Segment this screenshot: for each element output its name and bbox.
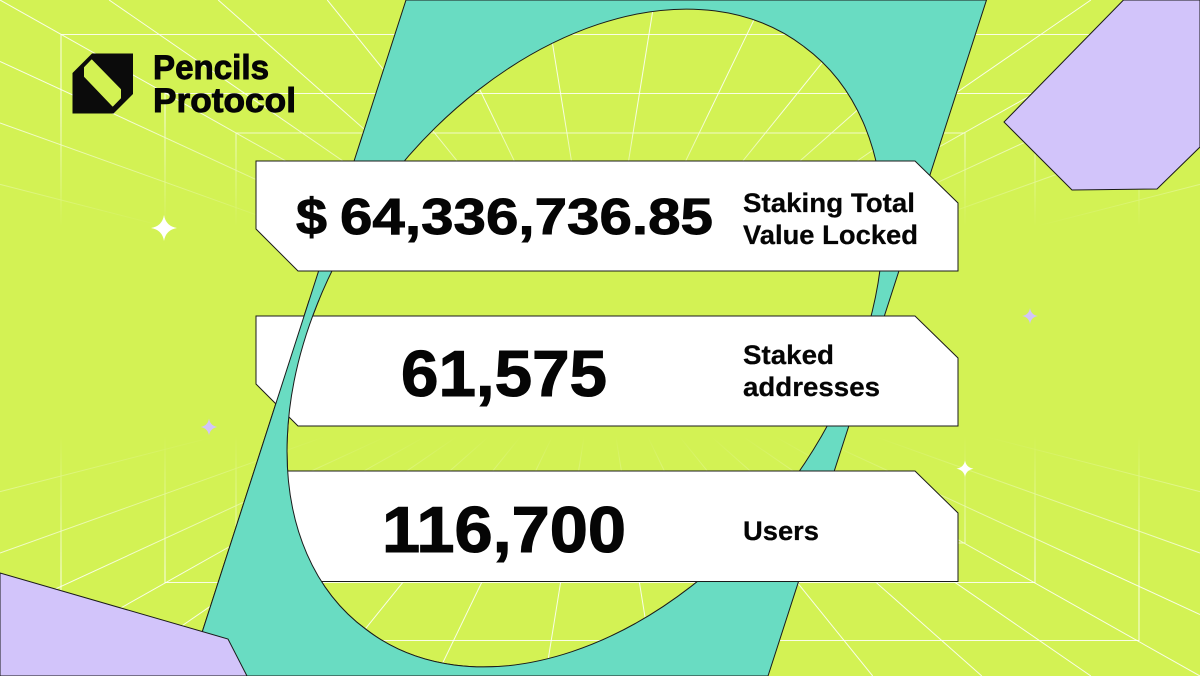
value: users: 116,700 (382, 493, 626, 566)
label: staked addresses: addresses (743, 372, 880, 402)
teal band passing over the left of lower panels (202, 300, 500, 668)
panel: users (256, 471, 958, 582)
value: staked addresses: 61,575 (401, 337, 607, 410)
label: staking total value locked: Value Locked (743, 220, 918, 250)
sparkle: purple right (1022, 308, 1038, 324)
wordmark: Pencils (153, 49, 269, 87)
purple shape: top right (1004, 0, 1200, 190)
sparkle: large white (151, 215, 177, 241)
label: staked addresses: Staked (743, 340, 834, 370)
wordmark: Protocol (153, 82, 296, 120)
label: staked addresses (743, 340, 880, 402)
panel: staked addresses (256, 316, 958, 426)
sparkle: small white (956, 460, 974, 477)
label: staking total value locked (743, 188, 918, 250)
teal parallelogram with elliptical opening (188, 0, 986, 676)
panel: staking total value locked (256, 161, 958, 271)
label: staking total value locked: Staking Total (743, 188, 915, 218)
value: total value locked: 64,336,736.85 (340, 188, 713, 245)
wordmark (153, 49, 296, 120)
label: users: Users (743, 516, 819, 546)
sparkle: purple left (200, 418, 218, 436)
value: total value locked: $ (296, 188, 327, 245)
icon: pencil mark (72, 54, 133, 114)
logo (72, 49, 296, 120)
purple shape: bottom left (0, 573, 247, 676)
